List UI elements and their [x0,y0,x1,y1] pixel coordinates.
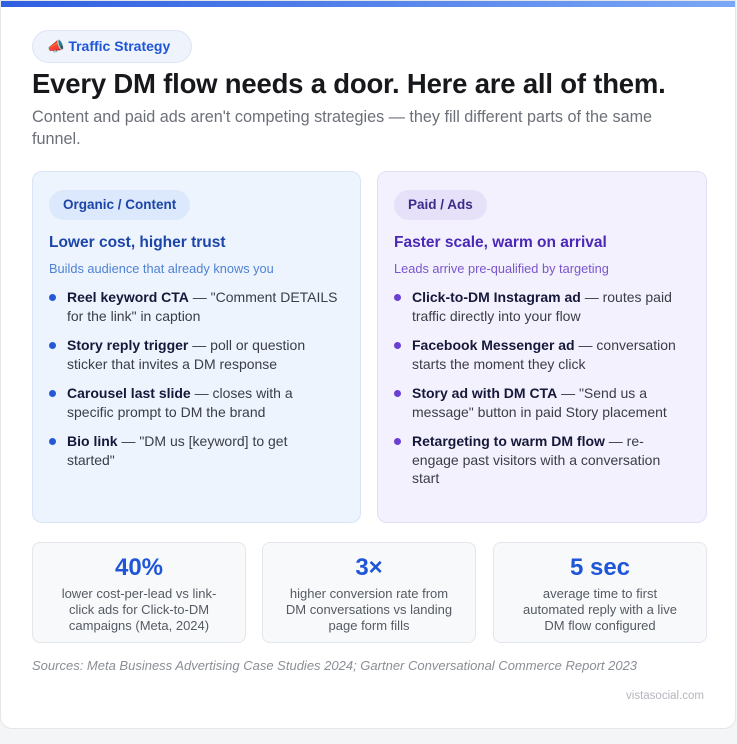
list: paid tactics: Click-to-DM Instagram ad — routes paid traffic directly into your flow [412,289,672,324]
list: organic tactics: Story reply trigger — poll or question sticker that invites a DM response [67,337,305,372]
tag: paid: Paid / Ads [408,197,473,212]
stat: 40%: lower cost-per-lead vs link-click ads for Click-to-DM campaigns (Meta, 2024) [62,586,216,633]
list: organic tactics: Reel keyword CTA — "Comment DETAILS for the link" in caption [67,289,338,324]
title: Every DM flow needs a door. Here are all of them. [32,68,666,99]
list: organic tactics: Bio link — "DM us [keyword] to get started" [67,433,287,468]
badge: Traffic Strategy [32,30,192,63]
heading: paid: Faster scale, warm on arrival [394,234,607,251]
brand: vistasocial.com [626,690,704,702]
subtitle: Content and paid ads aren't competing strategies — they fill different parts of the same funnel. [32,108,652,148]
stat: 5 sec: 5 sec [570,554,630,581]
list: organic tactics [49,289,338,468]
sources: Sources: Meta Business Advertising Case Studies 2024; Gartner Conversational Commerce Report 2023 [32,658,637,673]
badge: Traffic Strategy: 📣 Traffic Strategy [47,38,170,54]
stat: 3x: 3× [355,554,383,581]
list: paid tactics: Retargeting to warm DM flow — re-engage past visitors with a conversation start [412,433,660,486]
stat: 5 sec [493,542,707,643]
stat: 3x [262,542,476,643]
tag: paid [394,190,487,220]
stat: 40%: 40% [115,554,163,581]
heading: organic: Lower cost, higher trust [49,234,226,251]
list: paid tactics: Facebook Messenger ad — conversation starts the moment they click [412,337,676,372]
stat: 3x: higher conversion rate from DM conversations vs landing page form fills [286,586,452,633]
tag: organic: Organic / Content [63,197,176,212]
panel: paid [377,171,707,523]
list: paid tactics [394,289,676,486]
description: paid: Leads arrive pre-qualified by targeting [394,261,609,276]
list: paid tactics: Story ad with DM CTA — "Send us a message" button in paid Story placement [412,385,667,420]
stat: 5 sec: average time to first automated reply with a live DM flow configured [523,586,677,633]
panel: organic [32,171,361,523]
description: organic: Builds audience that already knows you [49,261,274,276]
tag: organic [49,190,190,220]
list: organic tactics: Carousel last slide — closes with a specific prompt to DM the brand [67,385,293,420]
stat: 40% [32,542,246,643]
